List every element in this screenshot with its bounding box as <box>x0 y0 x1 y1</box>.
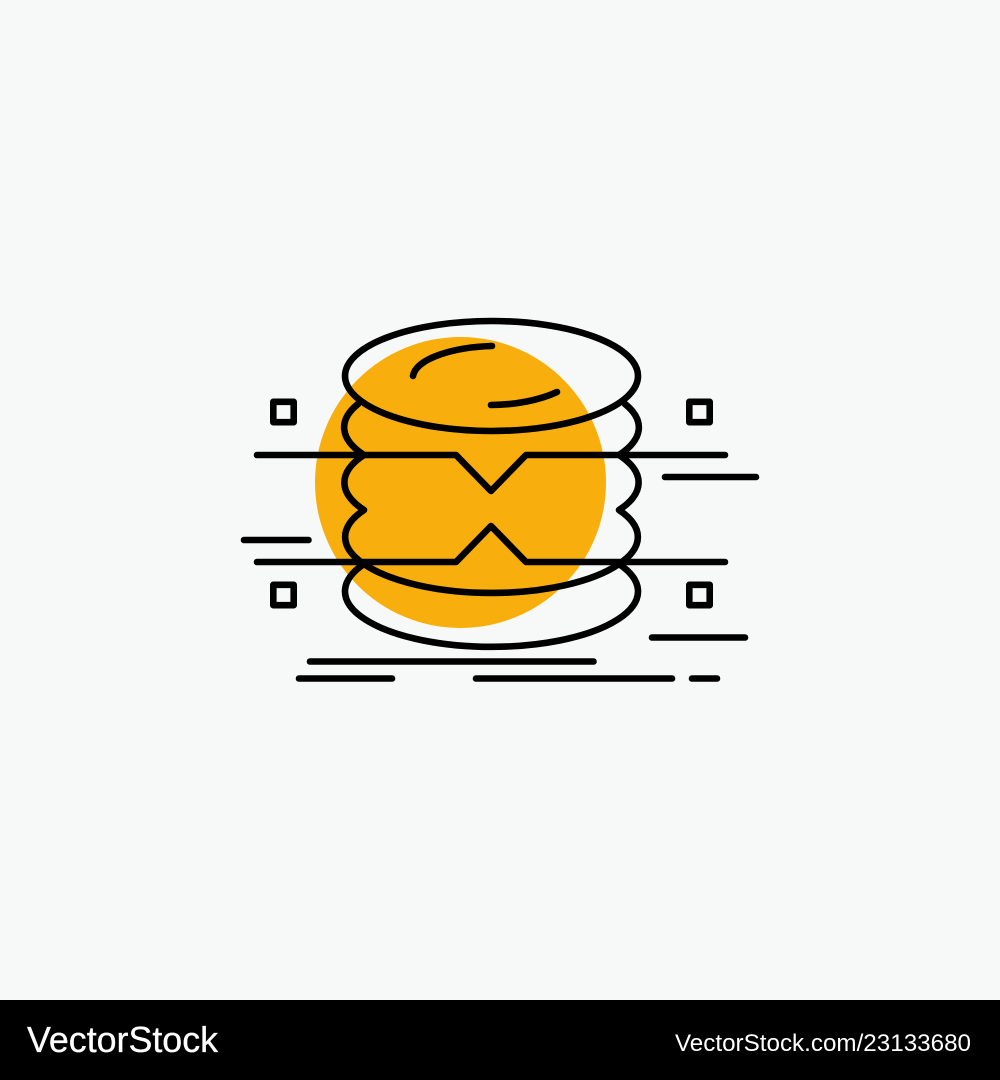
top disc <box>345 321 638 431</box>
icon: orange background circle <box>315 337 606 628</box>
footer bar <box>0 1000 1000 1080</box>
speed lines <box>244 477 756 678</box>
icon: small squares <box>273 402 710 605</box>
bottom disc rim <box>345 564 638 647</box>
upper notched line <box>257 455 725 491</box>
footer brand: VectorStock <box>27 1019 219 1060</box>
footer image id: VectorStock.com/23133680 <box>675 1030 971 1057</box>
icon: database stack <box>257 321 725 647</box>
left stack edge <box>344 404 364 564</box>
disc highlights <box>413 346 557 405</box>
lower notched line <box>257 526 725 562</box>
right stack edge <box>619 404 639 564</box>
third disc lower rim <box>364 564 619 593</box>
